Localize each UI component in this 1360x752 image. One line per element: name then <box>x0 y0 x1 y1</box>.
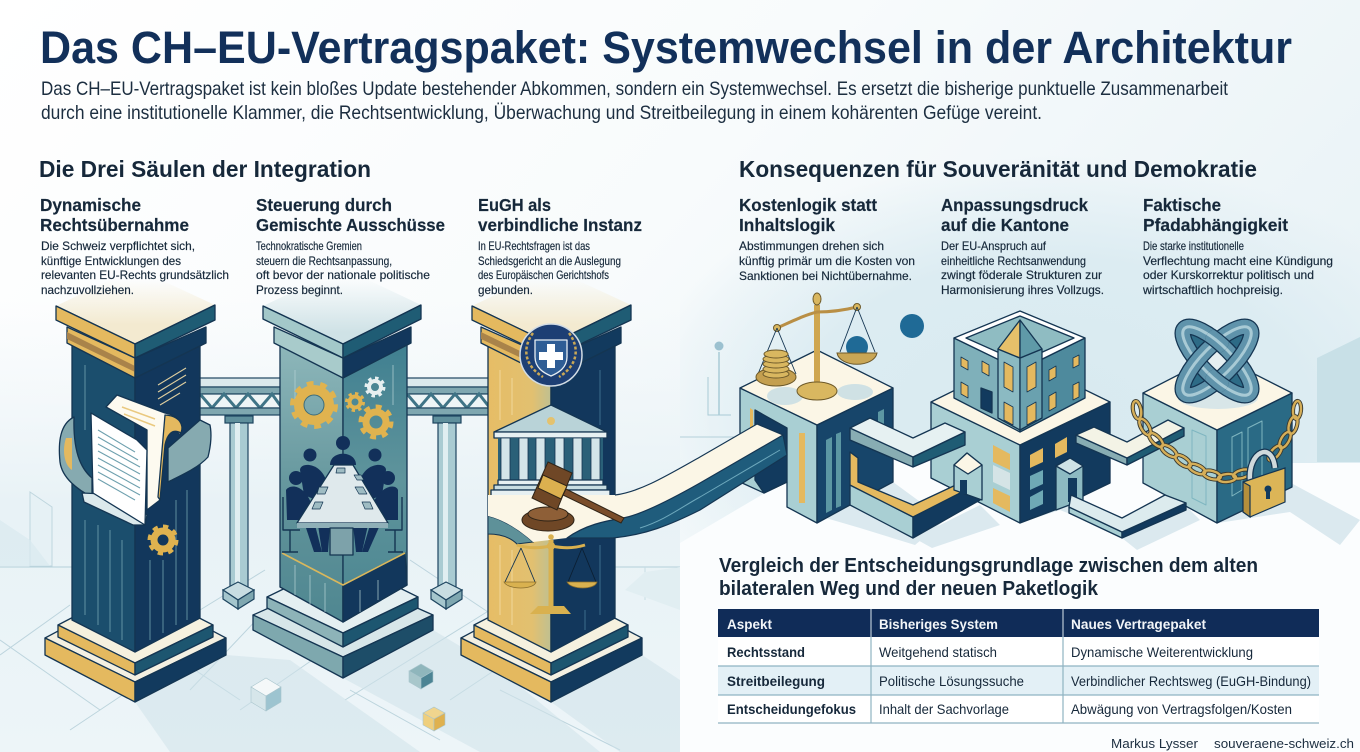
icon: document <box>91 395 182 525</box>
text block: Anpassungsdruck: Anpassungsdruck <box>941 195 1088 215</box>
comparison heading: Vergleich der Entscheidungsgrundlage zwischen dem alten <box>719 555 1258 577</box>
text block: Kostenlogik: Inhaltslogik <box>739 215 835 235</box>
icon: knot <box>1174 318 1260 404</box>
icon: justice scale <box>504 534 597 614</box>
pillar 2: Ausschüsse <box>253 268 433 678</box>
text block: Dynamische Rechtsübernahme: Dynamische <box>40 195 141 215</box>
bridge between pillars <box>198 378 490 609</box>
table header <box>727 616 1206 632</box>
table row: Rechtsstand: Dynamische Weiterentwicklung <box>1071 644 1253 660</box>
footer credits: Markus Lysser <box>1111 736 1199 751</box>
text block: EuGH: gebunden. <box>478 283 533 297</box>
text block: Dynamische Rechtsübernahme: Die Schweiz verpflichtet sich, <box>41 239 195 253</box>
text block: Kostenlogik: künftig primär um die Kosten von <box>739 254 915 268</box>
text block: Anpassungsdruck: einheitliche Rechtsanwendung <box>941 254 1086 268</box>
icon: gear <box>150 527 176 553</box>
icon: chain <box>1131 400 1302 483</box>
icon: gavel <box>522 462 624 531</box>
ribbon band <box>59 417 92 497</box>
connector 1 upper <box>850 418 965 467</box>
table row: Rechtsstand: Weitgehend statisch <box>879 644 997 660</box>
text block: EuGH <box>478 195 642 297</box>
table header: Bisheriges System <box>879 616 998 632</box>
text block: Anpassungsdruck: Der EU-Anspruch auf <box>941 239 1047 253</box>
text block: Gemischte Ausschüsse: Technokratische Gremien <box>256 239 362 253</box>
text block: Dynamische Rechtsübernahme <box>40 195 229 297</box>
table row: Rechtsstand: Rechtsstand <box>727 644 805 660</box>
connector 2 lower <box>1069 495 1186 538</box>
small decorative cubes <box>251 664 445 731</box>
text block: Anpassungsdruck: Harmonisierung ihres Vollzugs. <box>941 283 1104 297</box>
icon: padlock <box>1243 452 1285 517</box>
text block: Kostenlogik: Kostenlogik statt <box>739 195 877 215</box>
pillar 1: Rechtsübernahme <box>45 268 226 702</box>
table row: Streitbeilegung: Streitbeilegung <box>727 673 825 689</box>
block 1: Kostenlogik <box>740 350 893 523</box>
text block: Pfadabhängigkeit: oder Kurskorrektur politisch und <box>1143 268 1314 282</box>
connector 2 upper <box>1076 420 1184 465</box>
intro text <box>41 78 1229 124</box>
gatehouses <box>954 453 1083 510</box>
text block: Gemischte Ausschüsse: Prozess beginnt. <box>256 283 343 297</box>
footer credits: souveraene-schweiz.ch <box>1214 736 1354 751</box>
table header: Aspekt <box>727 616 772 632</box>
text block: Kostenlogik: Abstimmungen drehen sich <box>739 239 884 253</box>
text block: Gemischte Ausschüsse: Gemischte Ausschüsse <box>256 215 445 235</box>
text block: Gemischte Ausschüsse: Steuerung durch <box>256 195 392 215</box>
heading: consequences: Konsequenzen für Souveränität und Demokratie <box>739 156 1257 182</box>
text block: Pfadabhängigkeit <box>1142 195 1333 297</box>
text block: Anpassungsdruck <box>941 195 1104 297</box>
text block: Dynamische Rechtsübernahme: nachzuvollziehen. <box>41 283 134 297</box>
icon: seal with cross <box>520 324 582 386</box>
text block: Gemischte Ausschüsse: steuern die Rechtsanpassung, <box>256 254 392 268</box>
icon: cost scale on block <box>756 293 877 400</box>
ribbon from pillar three <box>488 424 787 544</box>
text block: EuGH: des Europäischen Gerichtshofs <box>478 268 609 282</box>
text block: EuGH: In EU-Rechtsfragen ist das <box>478 239 590 253</box>
comparison heading <box>719 555 1258 600</box>
table row: Entscheidungsfokus <box>727 701 1292 717</box>
block 2: Kantone <box>931 311 1110 523</box>
text block: EuGH: verbindliche Instanz <box>478 215 642 235</box>
text block: Dynamische Rechtsübernahme: relevanten EU-Rechts grundsätzlich <box>41 268 229 282</box>
text block: Pfadabhängigkeit: Pfadabhängigkeit <box>1143 215 1288 235</box>
support column 1 <box>223 416 254 609</box>
heading: three pillars: Die Drei Säulen der Integration <box>39 156 371 182</box>
text block: Gemischte Ausschüsse: oft bevor der nationale politische <box>256 268 430 282</box>
text block: Pfadabhängigkeit: Die starke institutionelle <box>1143 239 1244 253</box>
table row: Entscheidungsfokus: Inhalt der Sachvorlage <box>879 701 1009 717</box>
table row: Streitbeilegung: Verbindlicher Rechtsweg (EuGH-Bindung) <box>1071 673 1311 689</box>
text lines on pillar <box>158 368 186 405</box>
text block: Kostenlogik: Sanktionen bei Nichtübernahme. <box>739 269 912 283</box>
table row: Entscheidungsfokus: Entscheidungefokus <box>727 701 856 717</box>
table row: Entscheidungsfokus: Abwägung von Vertragsfolgen/Kosten <box>1071 701 1292 717</box>
text block: Dynamische Rechtsübernahme: künftige Entwicklungen des <box>41 254 181 268</box>
text block: Pfadabhängigkeit: Faktische <box>1143 195 1221 215</box>
text block: Gemischte Ausschüsse <box>256 195 445 297</box>
text block: Kostenlogik <box>739 195 915 283</box>
pillar 3: EuGH <box>461 268 642 702</box>
table row: Rechtsstand <box>727 644 1253 660</box>
icon: gears <box>293 378 391 437</box>
support column 2 <box>431 416 462 609</box>
table row: Streitbeilegung: Politische Lösungssuche <box>879 673 1024 689</box>
footer credits <box>1111 736 1354 751</box>
connector 1 lower <box>850 452 980 538</box>
icon: meeting table with people <box>282 436 403 555</box>
text block: Pfadabhängigkeit: Verflechtung macht eine Kündigung <box>1143 254 1333 268</box>
comparison table <box>718 609 1319 723</box>
block 3: Pfadabhängigkeit <box>1143 355 1292 523</box>
table header: Naues Vertragepaket <box>1071 616 1206 632</box>
text block: EuGH: Schiedsgericht an die Auslegung <box>478 254 621 268</box>
icon: court building <box>491 405 610 496</box>
text block: Anpassungsdruck: auf die Kantone <box>941 215 1069 235</box>
title: Das CH–EU-Vertragspaket: Systemwechsel in der Architektur <box>40 22 1292 73</box>
comparison heading: bilateralen Weg und der neuen Paketlogik <box>719 578 1099 600</box>
icon: government building <box>954 311 1085 432</box>
text block: Pfadabhängigkeit: wirtschaftlich hochpreisig. <box>1142 283 1283 297</box>
table row: Streitbeilegung <box>727 673 1311 689</box>
decorative ball <box>900 314 924 338</box>
text block: Anpassungsdruck: zwingt föderale Strukturen zur <box>941 268 1102 282</box>
text block: Dynamische Rechtsübernahme: Rechtsübernahme <box>40 215 189 235</box>
text block: EuGH: EuGH als <box>478 195 551 215</box>
intro text: durch eine institutionelle Klammer, die Rechtsentwicklung, Überwachung und Streitbeilegung in einem kohärenten Gefüge vereint. <box>41 102 1042 124</box>
